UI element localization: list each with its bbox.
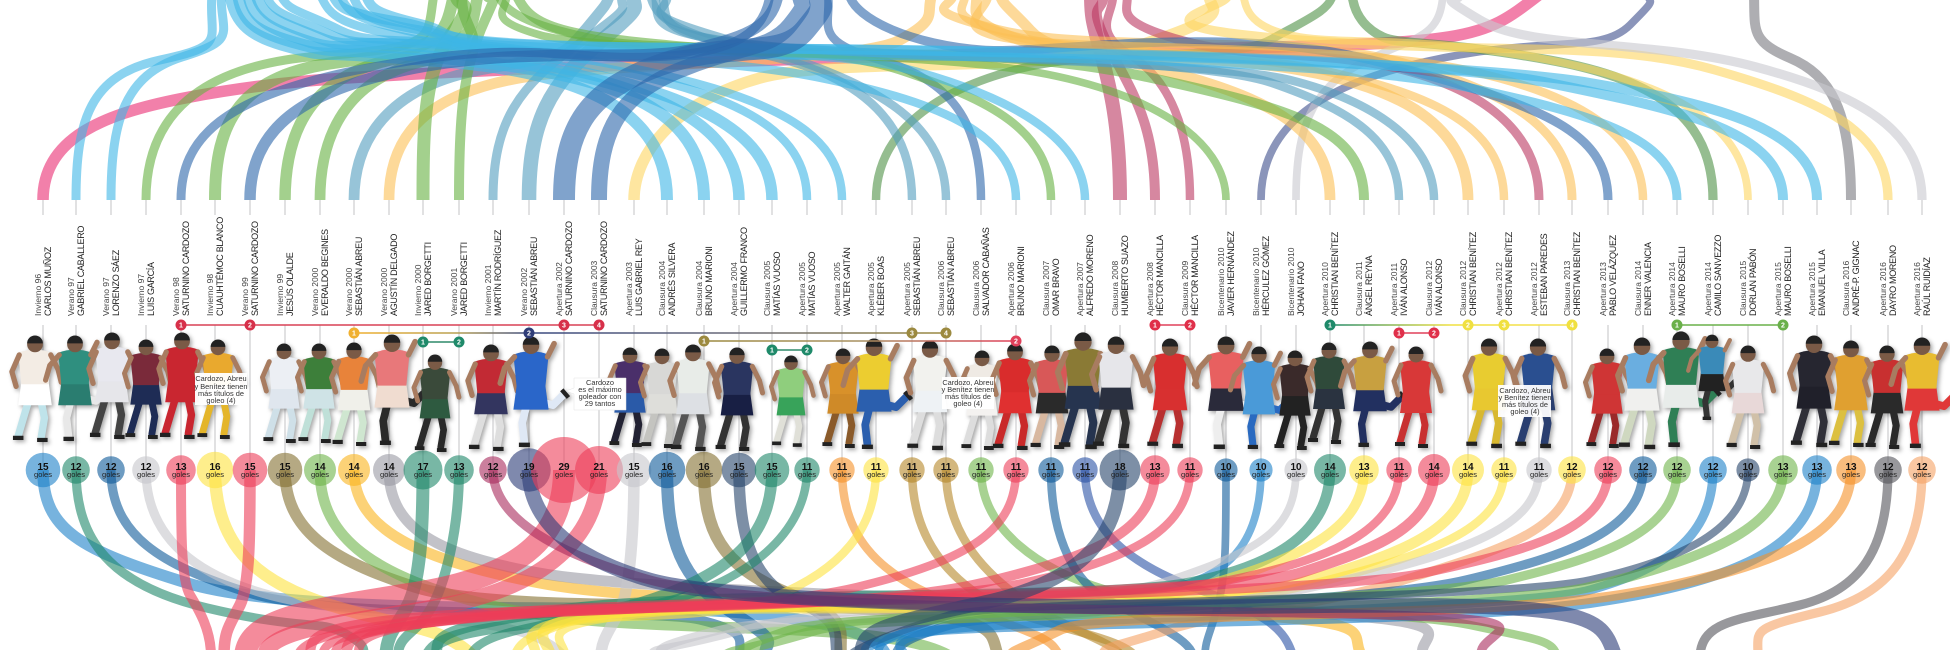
- goal numbers: 11: [976, 462, 987, 473]
- season and scorer labels: Apertura 2012: [1529, 262, 1539, 316]
- season and scorer labels: Clausura 2006: [971, 260, 981, 316]
- goal numbers: goles: [1252, 470, 1270, 479]
- goal numbers: 12: [1707, 462, 1719, 473]
- goal numbers: 11: [871, 462, 882, 473]
- season and scorer labels: CHRISTIAN BENÍTEZ: [1468, 231, 1478, 316]
- goal numbers: 13: [1149, 462, 1161, 473]
- goal bubbles: [26, 437, 1936, 503]
- season and scorer labels: Clausura 2007: [1041, 260, 1051, 316]
- goal numbers: 11: [1394, 462, 1405, 473]
- goal numbers: 16: [698, 462, 710, 473]
- goal numbers: goles: [414, 470, 432, 479]
- goal numbers: 15: [733, 462, 745, 473]
- season and scorer labels: MATÍAS VUOSO: [772, 251, 782, 316]
- connector: Abreu titles: 1: [352, 330, 356, 338]
- goal numbers: 12: [1671, 462, 1683, 473]
- season and scorer labels: JARED BORGETTI: [423, 242, 433, 316]
- season and scorer labels: SATURNINO CARDOZO: [181, 221, 191, 316]
- season and scorer labels: Clausura 2006: [936, 260, 946, 316]
- goal numbers: 15: [628, 462, 640, 473]
- season and scorer labels: CARLOS MUÑOZ: [43, 246, 53, 316]
- season and scorer labels: Apertura 2010: [1320, 262, 1330, 316]
- connector: Alonso titles: [1394, 328, 1440, 338]
- goal numbers: 15: [37, 462, 49, 473]
- season and scorer labels: Bicentenario 2010: [1286, 247, 1296, 316]
- season and scorer labels: Apertura 2007: [1075, 262, 1085, 316]
- connector: Benítez titles: [1324, 320, 1578, 330]
- season and scorer labels: Invierno 97: [136, 274, 146, 316]
- season and scorer labels: Clausura 2011: [1354, 261, 1364, 316]
- goal numbers: goles: [1495, 470, 1513, 479]
- connector: Vuoso titles: 1: [770, 348, 774, 354]
- goal numbers: goles: [1076, 470, 1094, 479]
- goal numbers: goles: [380, 470, 398, 479]
- goal numbers: goles: [1599, 470, 1617, 479]
- goal numbers: 12: [70, 462, 82, 473]
- goal numbers: goles: [1217, 470, 1235, 479]
- goal numbers: goles: [798, 470, 816, 479]
- season and scorer labels: SATURNINO CARDOZO: [564, 221, 574, 316]
- callout: Cardozo, Abreu y Benítez 3: Cardozo, Abreu: [1499, 386, 1551, 395]
- goal numbers: goles: [1321, 470, 1339, 479]
- goal numbers: goles: [1042, 470, 1060, 479]
- callout: Cardozo, Abreu y Benítez 3: más títulos de: [1502, 400, 1548, 409]
- goal numbers: 12: [1566, 462, 1578, 473]
- season and scorer labels: Clausura 2015: [1738, 260, 1748, 316]
- season and scorer labels: AGUSTÍN DELGADO: [389, 234, 399, 316]
- season and scorer labels: CUAUHTÉMOC BLANCO: [215, 217, 225, 316]
- season and scorer labels: JESÚS OLALDE: [285, 252, 295, 316]
- goal numbers: 10: [1255, 462, 1267, 473]
- connector: Alonso titles: 2: [1432, 330, 1436, 338]
- connector: Benítez titles: 4: [1570, 322, 1574, 330]
- season and scorer labels: Apertura 2015: [1773, 262, 1783, 316]
- season and scorer labels: JARED BORGETTI: [459, 242, 469, 316]
- season and scorer labels: WALTER GAITÁN: [842, 247, 852, 316]
- goal numbers: 12: [1637, 462, 1649, 473]
- goal numbers: goles: [484, 470, 502, 479]
- season and scorer labels: Verano 2002: [519, 268, 529, 316]
- connector: Borgetti titles: [418, 336, 464, 348]
- goal numbers: 12: [1882, 462, 1894, 473]
- season and scorer labels: ANDRÉS SILVERA: [667, 243, 677, 316]
- season and scorer labels: Invierno 96: [33, 274, 43, 316]
- connector: Mancilla titles: 1: [1153, 322, 1157, 330]
- goal numbers: goles: [1181, 470, 1199, 479]
- callout: máximo goleador: [566, 378, 626, 410]
- season and scorer labels: Apertura 2005: [832, 262, 842, 316]
- goal numbers: goles: [450, 470, 468, 479]
- callout: máximo goleador: Cardozo: [586, 378, 614, 387]
- goal numbers: 12: [487, 462, 499, 473]
- season and scorer labels: KLÉBER BOAS: [876, 256, 886, 316]
- season and scorer labels: OMAR BRAVO: [1051, 258, 1061, 316]
- goal numbers: goles: [1668, 470, 1686, 479]
- goal numbers: goles: [1390, 470, 1408, 479]
- season and scorer labels: Clausura 2004: [694, 260, 704, 316]
- season and scorer labels: HÉCTOR MANCILLA: [1190, 235, 1200, 316]
- season and scorer labels: Verano 98: [171, 277, 181, 316]
- season and scorer labels: Apertura 2016: [1912, 262, 1922, 316]
- callout: Cardozo, Abreu y Benítez 1: más títulos de: [198, 389, 244, 398]
- tick lines for all seasons: [43, 200, 1922, 470]
- season and scorer labels: IVÁN ALONSO: [1399, 258, 1409, 316]
- season and scorer labels: SEBASTIÁN ABREU: [354, 237, 364, 316]
- season and scorer labels: CAMILO SANVEZZO: [1713, 235, 1723, 316]
- goal numbers: 19: [523, 462, 535, 473]
- season and scorer labels: CHRISTIAN BENÍTEZ: [1330, 231, 1340, 316]
- goal numbers: 14: [348, 462, 360, 473]
- goal numbers: 14: [1428, 462, 1440, 473]
- season and scorer labels: Clausura 2003: [589, 260, 599, 316]
- season and scorer labels: Apertura 2005: [797, 262, 807, 316]
- season and scorer labels: Apertura 2013: [1598, 262, 1608, 316]
- goal numbers: 11: [802, 462, 813, 473]
- connector: Cardozo titles: 1: [179, 322, 183, 330]
- callout: máximo goleador: 29 tantos: [585, 399, 616, 408]
- goal numbers: goles: [1739, 470, 1757, 479]
- season and scorer labels: JOHAN FANO: [1296, 261, 1306, 316]
- ribbons: seasons to top teams: [43, 0, 1922, 200]
- season and scorer labels: Bicentenario 2010: [1251, 247, 1261, 316]
- callout: Cardozo, Abreu y Benítez 3: [1498, 385, 1552, 417]
- season and scorer labels: MARTÍN RODRÍGUEZ: [493, 229, 503, 316]
- callout: Cardozo, Abreu y Benítez 2: y Benítez tienen: [941, 385, 995, 394]
- goal numbers: goles: [1879, 470, 1897, 479]
- goal numbers: goles: [695, 470, 713, 479]
- callout: Cardozo, Abreu y Benítez 1: goleo (4): [206, 396, 236, 405]
- season and scorer labels: SEBASTIÁN ABREU: [946, 237, 956, 316]
- goal numbers: goles: [311, 470, 329, 479]
- goal numbers: goles: [763, 470, 781, 479]
- goal numbers: 14: [1324, 462, 1336, 473]
- connector: Borgetti titles: 2: [457, 340, 461, 346]
- connector: Marioni titles: [698, 336, 1022, 346]
- callout: Cardozo, Abreu y Benítez 1: Cardozo, Abreu: [195, 374, 247, 383]
- season and scorer labels: Apertura 2014: [1667, 262, 1677, 316]
- goal numbers: 15: [766, 462, 778, 473]
- goal numbers: 11: [941, 462, 952, 473]
- season and scorer labels: BRUNO MARIONI: [704, 246, 714, 316]
- season and scorer labels: Verano 2000: [310, 268, 320, 316]
- goal numbers: goles: [345, 470, 363, 479]
- goal numbers: goles: [276, 470, 294, 479]
- season and scorer labels: Apertura 2004: [729, 262, 739, 316]
- goal numbers: goles: [833, 470, 851, 479]
- season and scorer labels: Clausura 2004: [657, 260, 667, 316]
- connector: Benítez titles: 3: [1502, 322, 1506, 330]
- goal numbers: 16: [661, 462, 673, 473]
- goal numbers: 10: [1290, 462, 1302, 473]
- goal numbers: goles: [67, 470, 85, 479]
- season and scorer labels: EVERALDO BEGINES: [320, 229, 330, 316]
- season and scorer labels: Clausura 2005: [762, 260, 772, 316]
- callout: máximo goleador: es el máximo: [578, 385, 622, 394]
- connector: Benítez titles: 2: [1466, 322, 1470, 330]
- connector: Marioni titles: 2: [1014, 338, 1018, 346]
- season and scorer labels: CHRISTIAN BENÍTEZ: [1504, 231, 1514, 316]
- season and scorer labels: SALVADOR CABAÑAS: [981, 227, 991, 316]
- season and scorer labels: ÁNGEL REYNA: [1364, 255, 1374, 316]
- season and scorer labels: Clausura 2012: [1424, 260, 1434, 316]
- goal numbers: 12: [140, 462, 152, 473]
- callout: máximo goleador: goleador con: [579, 392, 621, 401]
- season and scorer labels: SATURNINO CARDOZO: [599, 221, 609, 316]
- season and scorer labels: Apertura 2005: [866, 262, 876, 316]
- goal numbers: 11: [907, 462, 918, 473]
- season and scorer labels: Apertura 2005: [902, 262, 912, 316]
- season and scorer labels: Invierno 2001: [483, 264, 493, 316]
- callout: Cardozo, Abreu y Benítez 2: Cardozo, Abreu: [942, 378, 994, 387]
- season and scorer labels: IVÁN ALONSO: [1434, 258, 1444, 316]
- season and scorer labels: HÉRCULEZ GÓMEZ: [1261, 235, 1271, 316]
- goal numbers: 11: [1011, 462, 1022, 473]
- connector: Vuoso titles: [766, 344, 812, 356]
- goal numbers: 14: [1462, 462, 1474, 473]
- connector: Cardozo titles: [176, 320, 604, 330]
- season and scorer labels: Apertura 2011: [1389, 262, 1399, 316]
- goal numbers: goles: [172, 470, 190, 479]
- season and scorer labels: Bicentenario 2010: [1216, 247, 1226, 316]
- goal numbers: 12: [105, 462, 117, 473]
- season and scorer labels: Apertura 2002: [554, 262, 564, 316]
- season and scorer labels: [33, 217, 1932, 316]
- goal numbers: goles: [1808, 470, 1826, 479]
- goal numbers: 12: [1916, 462, 1928, 473]
- goal numbers: 14: [383, 462, 395, 473]
- season and scorer labels: GUILLERMO FRANCO: [739, 227, 749, 316]
- callout: Cardozo, Abreu y Benítez 3: goleo (4): [1510, 407, 1540, 416]
- goal numbers: goles: [1913, 470, 1931, 479]
- goal numbers: 13: [1777, 462, 1789, 473]
- season and scorer labels: Apertura 2006: [1006, 262, 1016, 316]
- season and scorer labels: MATÍAS VUOSO: [807, 251, 817, 316]
- season and scorer labels: Clausura 2014: [1633, 260, 1643, 316]
- goal numbers: goles: [520, 470, 538, 479]
- season and scorer labels: EMANUEL VILLA: [1817, 249, 1827, 316]
- callout: Cardozo, Abreu y Benítez 1: y Benítez tienen: [194, 382, 248, 391]
- goal numbers: 10: [1220, 462, 1232, 473]
- connector: Boselli titles: [1672, 320, 1788, 330]
- season and scorer labels: SEBASTIÁN ABREU: [912, 237, 922, 316]
- goal numbers: 12: [1602, 462, 1614, 473]
- season and scorer labels: LUIS GARCÍA: [146, 262, 156, 316]
- goal numbers: goles: [1634, 470, 1652, 479]
- goal numbers: goles: [1842, 470, 1860, 479]
- connector: Alonso titles: 1: [1397, 330, 1401, 338]
- goal numbers: goles: [1355, 470, 1373, 479]
- season and scorer labels: SATURNINO CARDOZO: [250, 221, 260, 316]
- season and scorer labels: Invierno 2000: [413, 264, 423, 316]
- goal numbers: 10: [1742, 462, 1754, 473]
- season and scorer labels: Apertura 2012: [1494, 262, 1504, 316]
- season and scorer labels: RAÚL RUIDÍAZ: [1922, 257, 1932, 316]
- season and scorer labels: PABLO VELÁZQUEZ: [1608, 234, 1618, 316]
- goal numbers: 11: [1534, 462, 1545, 473]
- season and scorer labels: Verano 2001: [449, 268, 459, 316]
- goal numbers: 11: [1080, 462, 1091, 473]
- goal numbers: goles: [1774, 470, 1792, 479]
- connector: Marioni titles: 1: [702, 338, 706, 346]
- connector: Cardozo titles: 4: [597, 322, 601, 330]
- player figures: [12, 331, 1950, 450]
- goal numbers: goles: [1111, 470, 1129, 479]
- season and scorer labels: DAYRO MORENO: [1888, 245, 1898, 316]
- season and scorer labels: Apertura 2016: [1878, 262, 1888, 316]
- goal numbers: goles: [1459, 470, 1477, 479]
- callout: Cardozo, Abreu y Benítez 2: goleo (4): [953, 399, 983, 408]
- connector: Abreu titles: [348, 328, 952, 338]
- connector: Mancilla titles: 2: [1188, 322, 1192, 330]
- goal numbers: 21: [593, 462, 605, 473]
- goal numbers: [34, 462, 1931, 479]
- season and scorer labels: Apertura 2014: [1703, 262, 1713, 316]
- goal numbers: goles: [625, 470, 643, 479]
- goal numbers: 15: [279, 462, 291, 473]
- season and scorer labels: Verano 99: [240, 277, 250, 316]
- connector: Mancilla titles: [1150, 320, 1196, 330]
- goal numbers: goles: [867, 470, 885, 479]
- goal numbers: goles: [206, 470, 224, 479]
- goal numbers: 16: [209, 462, 221, 473]
- goal numbers: goles: [137, 470, 155, 479]
- season and scorer labels: Clausura 2012: [1458, 260, 1468, 316]
- goal numbers: goles: [1007, 470, 1025, 479]
- season and scorer labels: ESTEBAN PAREDES: [1539, 233, 1549, 316]
- season and scorer labels: MAURO BOSELLI: [1677, 246, 1687, 316]
- season and scorer labels: GABRIEL CABALLERO: [76, 226, 86, 316]
- connector: Abreu titles: 3: [910, 330, 914, 338]
- goal numbers: 11: [1499, 462, 1510, 473]
- goal numbers: 13: [1845, 462, 1857, 473]
- goal numbers: goles: [34, 470, 52, 479]
- season and scorer labels: LUIS GABRIEL REY: [634, 238, 644, 316]
- goal numbers: goles: [590, 470, 608, 479]
- goal numbers: goles: [1425, 470, 1443, 479]
- goal numbers: goles: [937, 470, 955, 479]
- connector: Abreu titles: 4: [944, 330, 948, 338]
- goal numbers: 13: [175, 462, 187, 473]
- goal numbers: 18: [1114, 462, 1126, 473]
- goal numbers: goles: [555, 470, 573, 479]
- connector: Abreu titles: 2: [527, 330, 531, 338]
- season and scorer labels: ENNER VALENCIA: [1643, 242, 1653, 316]
- connector: Vuoso titles: 2: [805, 348, 809, 354]
- connector: Borgetti titles: 1: [421, 340, 425, 346]
- goal numbers: goles: [730, 470, 748, 479]
- goal numbers: 29: [558, 462, 570, 473]
- season and scorer labels: Verano 97: [66, 277, 76, 316]
- goal numbers: goles: [102, 470, 120, 479]
- season and scorer labels: HUMBERTO SUAZO: [1120, 235, 1130, 316]
- goal numbers: 11: [1046, 462, 1057, 473]
- season and scorer labels: ALFREDO MORENO: [1085, 234, 1095, 316]
- connector: Cardozo titles: 2: [248, 322, 252, 330]
- goal numbers: goles: [1530, 470, 1548, 479]
- goal numbers: goles: [903, 470, 921, 479]
- season and scorer labels: Apertura 2003: [624, 262, 634, 316]
- connector: Benítez titles: 1: [1328, 322, 1332, 330]
- goal numbers: goles: [241, 470, 259, 479]
- connector: Cardozo titles: 3: [562, 322, 566, 330]
- season and scorer labels: Clausura 2016: [1841, 260, 1851, 316]
- callout: Cardozo, Abreu y Benítez 3: y Benítez tienen: [1498, 393, 1552, 402]
- season and scorer labels: BRUNO MARIONI: [1016, 246, 1026, 316]
- goal numbers: goles: [1287, 470, 1305, 479]
- season and scorer labels: Apertura 2008: [1145, 262, 1155, 316]
- season and scorer labels: Invierno 99: [275, 274, 285, 316]
- season and scorer labels: Clausura 2013: [1562, 260, 1572, 316]
- season and scorer labels: CHRISTIAN BENÍTEZ: [1572, 231, 1582, 316]
- season and scorer labels: SEBASTIÁN ABREU: [529, 237, 539, 316]
- season and scorer labels: Clausura 2009: [1180, 260, 1190, 316]
- goal numbers: goles: [1704, 470, 1722, 479]
- season and scorer labels: Apertura 2015: [1807, 262, 1817, 316]
- goal numbers: 13: [453, 462, 465, 473]
- season and scorer labels: Verano 2000: [379, 268, 389, 316]
- callout: Cardozo, Abreu y Benítez 1: [194, 373, 248, 405]
- season and scorer labels: Verano 2000: [344, 268, 354, 316]
- goal numbers: 13: [1811, 462, 1823, 473]
- connector: Boselli titles: 2: [1781, 322, 1785, 330]
- season and scorer labels: MAURO BOSELLI: [1783, 246, 1793, 316]
- goal numbers: 11: [837, 462, 848, 473]
- goal numbers: 11: [1185, 462, 1196, 473]
- season and scorer labels: ANDRÉ-P. GIGNAC: [1851, 240, 1861, 316]
- goal numbers: goles: [1146, 470, 1164, 479]
- goal numbers: 13: [1358, 462, 1370, 473]
- goal numbers: 17: [417, 462, 429, 473]
- season and scorer labels: Verano 97: [101, 277, 111, 316]
- goal numbers: goles: [1563, 470, 1581, 479]
- season and scorer labels: LORENZO SÁEZ: [111, 249, 121, 316]
- goal numbers: 15: [244, 462, 256, 473]
- goal numbers: goles: [972, 470, 990, 479]
- season and scorer labels: HÉCTOR MANCILLA: [1155, 235, 1165, 316]
- season and scorer labels: DORLAN PABÓN: [1748, 249, 1758, 316]
- season and scorer labels: JAVIER HERNÁNDEZ: [1226, 231, 1236, 316]
- goal numbers: 14: [314, 462, 326, 473]
- ribbons: goal bubbles to bottom teams: [43, 470, 1922, 650]
- season and scorer labels: Invierno 98: [205, 274, 215, 316]
- goal numbers: goles: [658, 470, 676, 479]
- season and scorer labels: Clausura 2008: [1110, 260, 1120, 316]
- callout: Cardozo, Abreu y Benítez 2: [941, 377, 995, 409]
- connector: Boselli titles: 1: [1675, 322, 1679, 330]
- callout: Cardozo, Abreu y Benítez 2: más títulos de: [945, 392, 991, 401]
